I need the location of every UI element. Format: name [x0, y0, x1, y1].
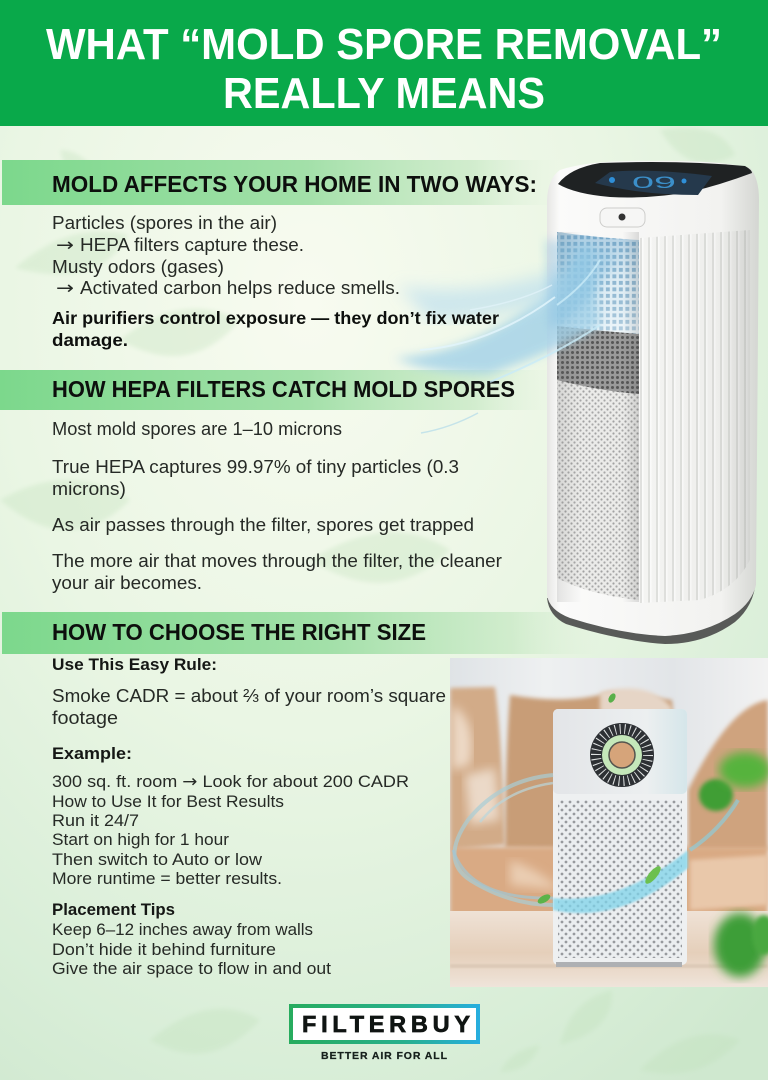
- text block: placement tips: Give the air space to flow in and out: [52, 959, 331, 978]
- blurred foliage: [699, 779, 733, 811]
- pillows: [450, 687, 505, 850]
- text block: two ways: damage.: [52, 330, 128, 350]
- text block: HEPA: True HEPA captures 99.97% of tiny particles (0.3: [52, 457, 459, 477]
- text block: HEPA: As air passes through the filter, spores get trapped: [52, 515, 474, 535]
- text block: example and usage: Start on high for 1 hour: [52, 830, 229, 849]
- title banner: [0, 0, 768, 126]
- text block: example and usage: Then switch to Auto or low: [52, 850, 263, 869]
- air purifier tower illustration: [547, 161, 759, 644]
- text block: two ways: →: [56, 278, 74, 299]
- section heading bar: size: [2, 612, 602, 654]
- airflow swoosh: [395, 240, 615, 433]
- text block: HEPA: [52, 419, 502, 593]
- filter layers: [557, 232, 639, 335]
- section heading bar: two ways: MOLD AFFECTS YOUR HOME IN TWO WAYS:: [52, 171, 537, 197]
- text block: two ways: Musty odors (gases): [52, 257, 224, 277]
- dark base strip: [547, 580, 756, 644]
- Filterbuy logo: FILTERBUY: [302, 1011, 470, 1037]
- text block: placement tips: Placement Tips: [52, 901, 175, 919]
- text block: placement tips: Don’t hide it behind furniture: [52, 940, 276, 959]
- top panel: [558, 162, 752, 197]
- text block: example and usage: 300 sq. ft. room → Look for about 200 CADR: [52, 772, 409, 792]
- text block: sizing rule: footage: [52, 708, 118, 728]
- air purifier tower illustration: 09: [632, 173, 676, 192]
- text block: HEPA: your air becomes.: [52, 573, 202, 593]
- sensor button: [600, 208, 645, 227]
- text block: two ways: Air purifiers control exposure — they don’t fix water: [52, 308, 499, 328]
- air streams: [454, 775, 553, 905]
- text block: HEPA: Most mold spores are 1–10 microns: [52, 419, 342, 439]
- table: [450, 911, 768, 987]
- text block: HEPA: The more air that moves through the filter, the cleaner: [52, 551, 502, 571]
- section heading bar: HEPA: [0, 370, 558, 410]
- section heading bar: two ways: [2, 160, 558, 205]
- sofa seat: [450, 844, 768, 911]
- room photo with small purifier: [450, 658, 768, 987]
- title banner: REALLY MEANS: [223, 69, 545, 118]
- text block: sizing rule: Smoke CADR = about ⅔ of your room’s square: [52, 686, 446, 706]
- ribbed panel: [640, 230, 750, 603]
- text block: two ways: Particles (spores in the air): [52, 213, 277, 233]
- text block: example and usage: Run it 24/7: [52, 811, 139, 830]
- text block: two ways: [52, 213, 499, 350]
- device: [553, 709, 687, 965]
- main white body: [547, 161, 759, 636]
- text block: placement tips: Keep 6–12 inches away from walls: [52, 920, 313, 939]
- text block: example and usage: More runtime = better results.: [52, 869, 282, 888]
- text block: placement tips: [52, 901, 331, 978]
- section heading bar: size: HOW TO CHOOSE THE RIGHT SIZE: [52, 619, 426, 645]
- text block: sizing rule: Use This Easy Rule:: [52, 656, 217, 674]
- text block: sizing rule: [52, 656, 446, 763]
- text block: two ways: Activated carbon helps reduce smells.: [80, 278, 400, 298]
- Filterbuy logo: [289, 1004, 480, 1062]
- display: [595, 171, 712, 195]
- text block: HEPA: microns): [52, 479, 126, 499]
- text block: two ways: HEPA filters capture these.: [80, 235, 304, 255]
- title banner: WHAT “MOLD SPORE REMOVAL”: [46, 20, 722, 69]
- text block: sizing rule: Example:: [52, 745, 132, 763]
- text block: example and usage: [52, 772, 409, 888]
- section heading bar: HEPA: HOW HEPA FILTERS CATCH MOLD SPORES: [52, 376, 515, 402]
- fan: [590, 723, 654, 787]
- small leaves: [645, 866, 661, 884]
- Filterbuy logo: BETTER AIR FOR ALL: [321, 1050, 448, 1062]
- text block: two ways: →: [56, 235, 74, 256]
- text block: example and usage: How to Use It for Best Results: [52, 792, 284, 811]
